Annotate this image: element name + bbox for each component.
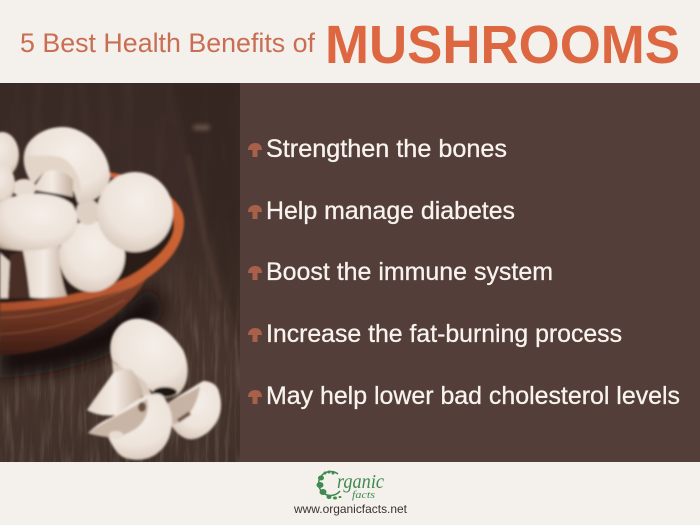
title bbox=[20, 15, 680, 75]
shadow between slices bbox=[153, 387, 177, 397]
logo word: Organic: rganic bbox=[337, 471, 384, 493]
title: subtitle line: 5 Best Health Benefits of bbox=[20, 28, 315, 58]
benefit text: Increase the fat-burning process bbox=[266, 320, 622, 348]
loose whole mushroom bbox=[87, 319, 188, 416]
panel: benefits list bbox=[240, 83, 700, 462]
benefit text: May help lower bad cholesterol levels bbox=[266, 382, 680, 410]
icon: mushroom bbox=[248, 390, 262, 404]
benefit 4 bbox=[248, 320, 622, 348]
benefit 1 bbox=[248, 135, 507, 163]
logo word: facts: facts bbox=[352, 489, 375, 501]
footer logo bbox=[293, 470, 408, 516]
mushroom half slices bbox=[88, 381, 221, 460]
upper mushroom bbox=[24, 127, 110, 203]
icon: leaf ring bbox=[316, 470, 342, 500]
benefit text: Boost the immune system bbox=[266, 258, 553, 286]
panel: mushroom photo bbox=[0, 83, 240, 462]
benefit text: Help manage diabetes bbox=[266, 197, 515, 225]
mushrooms in bowl bbox=[0, 127, 173, 298]
benefit 5 bbox=[248, 382, 680, 410]
bowl bbox=[0, 172, 184, 355]
icon: mushroom bbox=[248, 328, 262, 342]
benefit text: Strengthen the bones bbox=[266, 135, 507, 163]
benefit 3 bbox=[248, 258, 553, 286]
title: MUSHROOMS: MUSHROOMS bbox=[325, 15, 680, 75]
icon: mushroom bbox=[248, 205, 262, 219]
benefit 2 bbox=[248, 197, 515, 225]
icon: mushroom bbox=[248, 266, 262, 280]
shadow under bowl bbox=[0, 285, 165, 378]
icon: mushroom bbox=[248, 143, 262, 157]
website url: www.organicfacts.net bbox=[293, 502, 408, 516]
